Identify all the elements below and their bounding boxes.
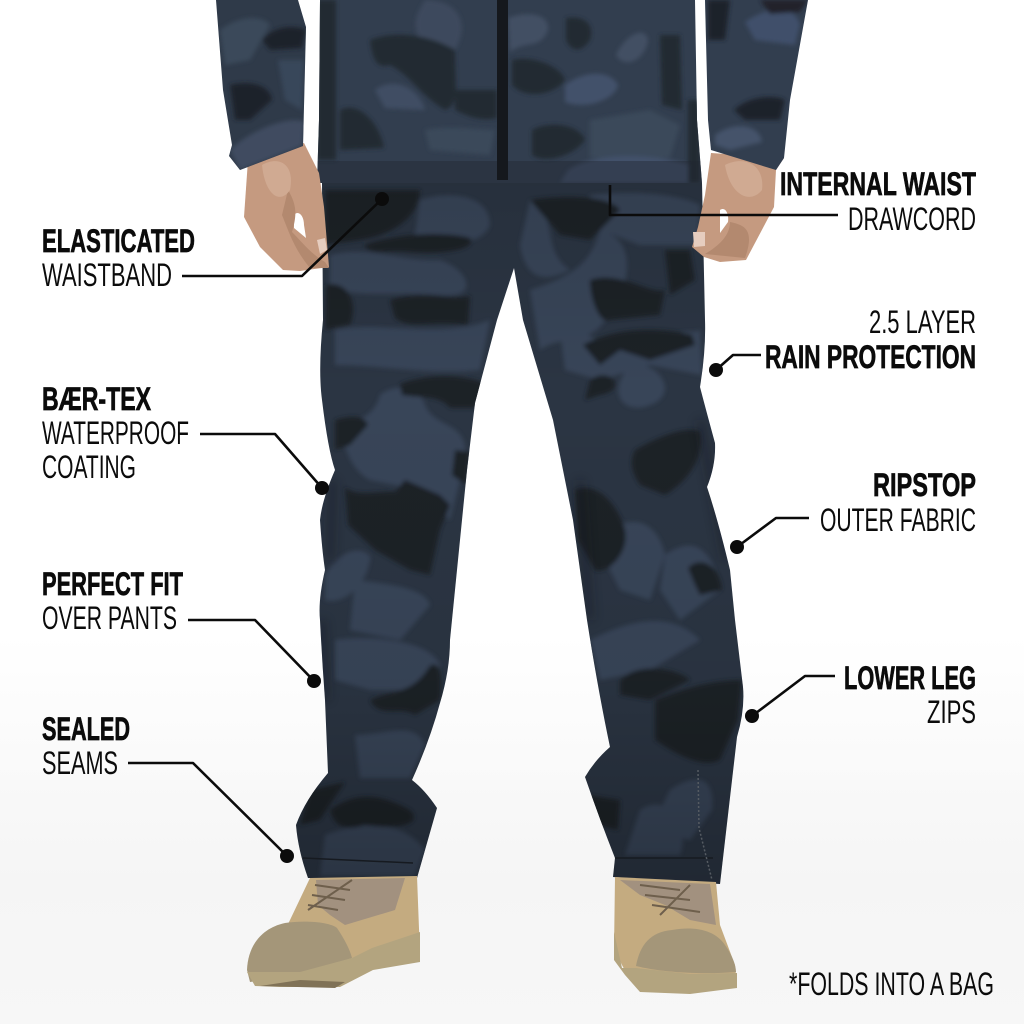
right sleeve xyxy=(705,0,808,170)
callout: 2.5 layer rain protection: 2.5 LAYER xyxy=(869,304,976,340)
callout: elasticated waistband: ELASTICATED xyxy=(42,223,195,259)
hem stitching xyxy=(303,858,713,863)
hands xyxy=(244,143,784,271)
callout: 2.5 layer rain protection xyxy=(709,304,976,377)
callout: perfect fit over pants xyxy=(42,566,321,688)
callout: elasticated waistband: WAISTBAND xyxy=(42,257,172,293)
pants xyxy=(290,180,750,890)
callout: baer-tex waterproof coating xyxy=(42,381,329,495)
photo: model wearing camo rain pants xyxy=(210,0,815,994)
right boot xyxy=(614,877,737,994)
jacket xyxy=(310,0,710,190)
callout: elasticated waistband xyxy=(42,192,389,293)
lower leg zip xyxy=(698,770,712,880)
callout: ripstop outer fabric: RIPSTOP xyxy=(873,467,976,503)
pants shading xyxy=(296,730,738,884)
callout: perfect fit over pants: OVER PANTS xyxy=(42,600,177,636)
callout: internal waist drawcord xyxy=(610,166,976,237)
callout: lower leg zips xyxy=(745,660,976,730)
callout: lower leg zips: ZIPS xyxy=(927,694,976,730)
callout: baer-tex waterproof coating: WATERPROOF xyxy=(42,415,189,451)
jacket zipper xyxy=(497,0,508,180)
callout: sealed seams: SEALED xyxy=(42,711,130,747)
left boot xyxy=(247,876,420,988)
jacket hem band xyxy=(317,161,703,183)
callout: baer-tex waterproof coating: COATING xyxy=(42,449,136,485)
callout: baer-tex waterproof coating: BÆR-TEX xyxy=(42,381,151,417)
left sleeve xyxy=(216,0,306,170)
callout: sealed seams xyxy=(42,711,294,863)
callout: sealed seams: SEAMS xyxy=(42,745,118,781)
callout: ripstop outer fabric xyxy=(730,467,976,554)
callout: perfect fit over pants: PERFECT FIT xyxy=(42,566,183,602)
